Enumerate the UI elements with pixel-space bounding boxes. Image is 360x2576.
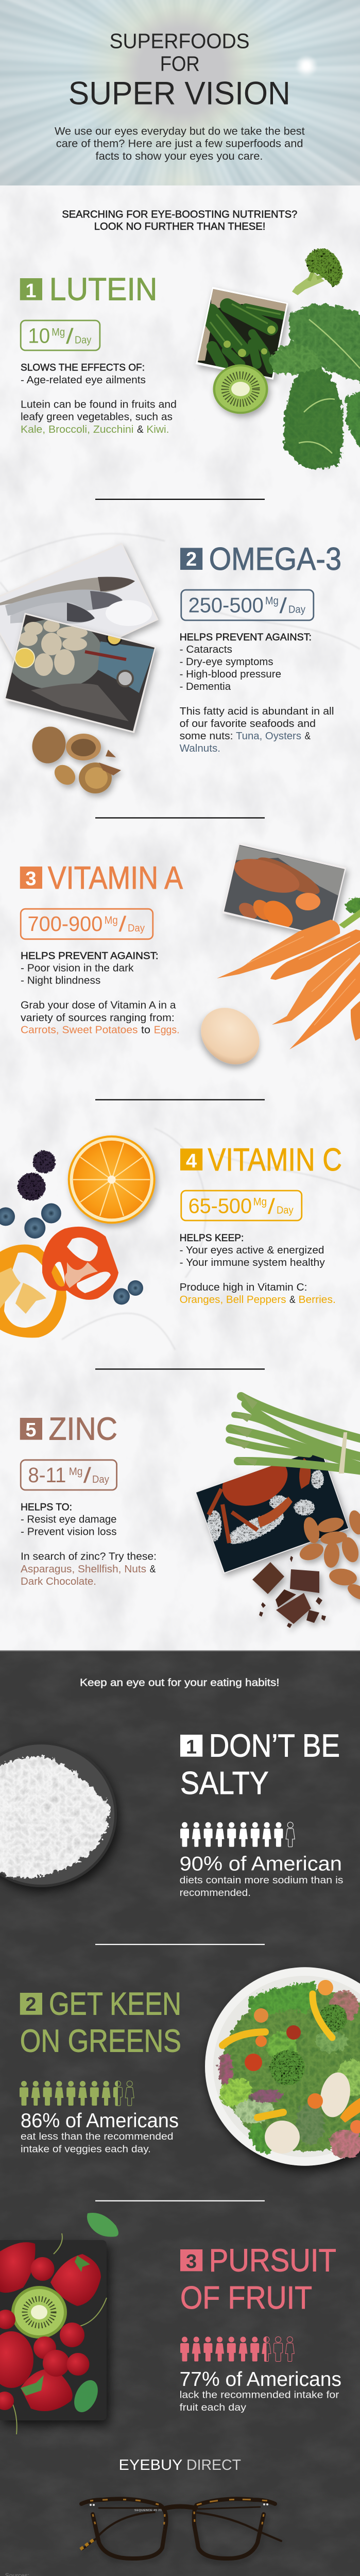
lutein benefits [21,362,146,386]
intro paragraph: care of them? Here are just a few superfoods and [56,138,303,150]
vitamin a sources text: Carrots, Sweet Potatoes [21,1025,138,1036]
vitamin c dose box: 65-500 [188,1194,252,1217]
zinc dose box: Day [92,1474,109,1485]
vitamin a sources text: to [141,1025,150,1036]
icon: egg [190,996,271,1076]
icon: red bell pepper [42,1227,118,1300]
logo: eyebuydirect: EYEBUY [118,2457,182,2473]
omega-3 dose box: / [279,594,287,618]
marble background [0,185,360,1651]
zinc benefits: - Resist eye damage [21,1514,116,1526]
icon: salad bowl [205,1967,360,2166]
panel: get keen on greens [20,1967,360,2166]
lutein sources text: Lutein can be found in fruits and [21,399,177,411]
greens badge: 2 [25,1994,37,2015]
vitamin a benefits [21,950,159,986]
vitamin c benefits: HELPS KEEP: [180,1232,244,1244]
omega-3 sources text: Tuna, Oysters [236,731,301,742]
fruit heading: PURSUIT [209,2243,336,2278]
zinc dose box: 8-11 [28,1463,66,1487]
icon: tortoise eyeglasses [80,2499,281,2558]
vitamin a benefits: - Night blindness [21,975,100,986]
salty statistic: 90% of American [180,1853,342,1875]
photo: fish on ice [0,543,163,664]
chalkboard background [0,1650,360,2576]
lutein sources text: Kale, Broccoli, Zucchini [21,424,134,435]
vitamin a dose box: Day [128,923,145,934]
salty heading: SALTY [180,1766,269,1801]
vitamin a dose box [21,909,153,939]
lutein benefits: SLOWS THE EFFECTS OF: [21,362,145,373]
intro paragraph [55,126,305,162]
vitamin c benefits: - Your immune system healthy [180,1257,325,1268]
section heading: searching for nutrients [62,209,297,232]
icon: blueberries [0,1204,143,1304]
photo: crab [193,1445,350,1577]
vitamin a badge: 3 [25,868,37,890]
icon: bowl of salt [0,1742,117,1887]
intro paragraph: facts to show your eyes you care. [96,150,263,162]
lutein sources text: leafy green vegetables, such as [21,412,173,423]
fruit description [180,2390,339,2413]
hero background: close-up of iris [0,0,360,185]
eating habits heading: Keep an eye out for your eating habits! [80,1677,279,1689]
zinc sources text: In search of zinc? Try these: [21,1551,157,1563]
greens heading: ON GREENS [20,2024,181,2059]
divider [95,499,265,500]
omega-3 benefits: - High-blood pressure [180,669,281,680]
lutein dose box: Mg [52,327,65,338]
icon: asparagus [227,1393,360,1472]
panel: vitamin c [0,1136,342,1337]
icon: walnuts [27,722,121,793]
omega-3 badge [180,548,202,570]
divider [95,1099,265,1100]
vitamin c badge: 4 [186,1150,197,1172]
divider [95,1368,265,1369]
icon: fruit on slate [0,2233,107,2434]
lutein dose box [21,320,100,350]
icon: yellow bell pepper [0,1245,66,1337]
vitamin a dose box: 700-900 [28,912,102,936]
title: SUPERFOODS [110,29,250,53]
omega-3 heading: OMEGA-3 [209,541,341,577]
icon: orange slice [68,1136,156,1224]
lutein badge [20,278,42,302]
omega-3 benefits: HELPS PREVENT AGAINST: [180,632,312,643]
vitamin a dose box: Mg [105,914,118,926]
panel: vitamin a [20,840,360,1076]
pictogram: 86 percent people [20,2081,134,2106]
vitamin a badge [20,867,42,890]
kale veins [299,319,360,453]
omega-3 sources text: Walnuts. [180,743,220,754]
panel: zinc [20,1393,360,1628]
fruit description: fruit each day [180,2402,247,2413]
greens description: intake of veggies each day. [21,2144,151,2155]
lutein dose box: Day [75,335,91,346]
vitamin c dose box: / [268,1194,275,1218]
vitamin c sources text: Produce high in Vitamin C: [180,1282,307,1293]
zinc dose box [21,1460,117,1490]
vitamin c sources text [180,1282,336,1306]
greens badge [20,1993,42,2015]
divider [95,1944,265,1945]
section heading: searching for nutrients: SEARCHING FOR EYE-BOOSTING NUTRIENTS? [62,209,297,220]
section heading: searching for nutrients: LOOK NO FURTHER THAN THESE! [94,221,265,232]
omega-3 badge: 2 [186,549,197,570]
greens statistic: 86% of Americans [21,2110,179,2132]
zinc dose box: Mg [69,1466,82,1478]
lutein dose box: / [66,324,74,348]
logo: eyebuydirect: DIRECT [186,2457,241,2473]
salty description: diets contain more sodium than is [180,1875,343,1886]
lutein sources text: Kiwi. [146,424,169,435]
salty badge: 1 [186,1737,197,1758]
omega-3 dose box: 250-500 [188,593,264,617]
lutein heading: LUTEIN [49,272,157,308]
icon: mint leaf [87,2213,118,2237]
fruit heading: OF FRUIT [180,2280,312,2316]
pictogram: 77 percent people [180,2337,294,2362]
icon: kiwi slice [213,364,268,414]
photo: oysters [0,611,160,734]
greens heading: GET KEEN [49,1987,181,2022]
fruit description: lack the recommended intake for [180,2390,339,2401]
icon: blackberries [17,1150,55,1200]
omega-3 dose box: Mg [265,595,279,607]
fruit statistic: 77% of Americans [180,2368,341,2391]
salty description: recommended. [180,1888,251,1899]
omega-3 sources text: This fatty acid is abundant in all [180,706,334,717]
zinc heading: ZINC [48,1412,117,1447]
omega-3 sources text: some nuts: [180,731,233,742]
vitamin c badge [180,1148,202,1172]
panel: lutein [20,248,360,467]
greens description [21,2131,174,2155]
salty description [180,1875,343,1899]
salty badge [180,1735,202,1758]
divider [95,817,265,819]
vitamin a sources text [21,1000,180,1036]
icon: carrots [217,896,360,1049]
fruit badge: 3 [186,2251,197,2273]
zinc badge: 5 [25,1419,37,1441]
vitamin c dose box: Day [277,1205,294,1216]
pictogram: 90 percent people [180,1822,295,1847]
vitamin c sources text: & [289,1294,296,1306]
zinc sources text [21,1551,157,1587]
omega-3 benefits: - Dry-eye symptoms [180,656,273,668]
lutein dose box: 10 [28,324,50,347]
panel: omega-3 [0,541,341,793]
lutein badge: 1 [25,280,37,302]
omega-3 sources text [180,706,334,754]
fruit badge [180,2249,202,2273]
vitamin c dose box: Mg [253,1196,267,1208]
zinc sources text: & [150,1564,156,1575]
icon: dark chocolate [252,1556,326,1628]
lutein sources text [21,399,177,435]
vitamin c benefits: - Your eyes active & energized [180,1245,324,1256]
greens heading [20,1987,181,2059]
omega-3 benefits [180,632,312,692]
omega-3 benefits: - Cataracts [180,644,232,655]
lutein benefits: - Age-related eye ailments [21,375,146,386]
panel: pursuit of fruit [0,2213,341,2434]
omega-3 dose box [181,590,314,620]
vitamin c dose box [181,1191,302,1221]
photo: zucchini [191,283,294,386]
salty heading [180,1728,340,1801]
divider [95,2200,265,2201]
omega-3 benefits: - Dementia [180,681,231,692]
vitamin c benefits [180,1232,325,1268]
vitamin a sources text: Grab your dose of Vitamin A in a [21,1000,176,1011]
zinc sources text: Dark Chocolate. [21,1576,96,1587]
vitamin a benefits: - Poor vision in the dark [21,963,134,974]
title [68,29,290,112]
photo: sweet potatoes [221,840,348,940]
panel: don't be salty [0,1728,343,1899]
lutein sources text: & [137,424,144,435]
salty heading: DON’T BE [209,1728,340,1764]
fruit heading [180,2243,336,2316]
icon: kale leaves [269,303,360,467]
vitamin a sources text: Eggs. [154,1025,180,1036]
vitamin a benefits: HELPS PREVENT AGAINST: [21,950,159,961]
zinc sources text: Asparagus, Shellfish, Nuts [21,1564,146,1575]
title: FOR [160,52,200,76]
intro paragraph: We use our eyes everyday but do we take the best [55,126,305,138]
icon: broccoli [292,248,342,295]
vitamin c sources text: Oranges, Bell Peppers [180,1294,286,1306]
zinc badge [20,1418,42,1441]
icon: tortoise eyeglasses: SEQUENCE 45 21 [134,2509,162,2512]
zinc benefits: - Prevent vision loss [21,1527,116,1538]
omega-3 sources text: & [305,731,311,742]
vitamin a dose box: / [118,912,127,936]
zinc dose box: / [83,1463,91,1487]
zinc benefits: HELPS TO: [21,1501,72,1513]
vitamin a heading: VITAMIN A [48,860,183,896]
icon: almonds [297,1509,360,1603]
omega-3 sources text: of our favorite seafoods and [180,718,316,730]
vitamin c sources text: Berries. [299,1294,336,1306]
vitamin a sources text: variety of sources ranging from: [21,1012,175,1024]
title: SUPER VISION [68,76,290,112]
greens description: eat less than the recommended [21,2131,174,2142]
logo: eyebuydirect [118,2457,241,2473]
omega-3 dose box: Day [288,604,305,615]
zinc benefits [21,1501,116,1538]
